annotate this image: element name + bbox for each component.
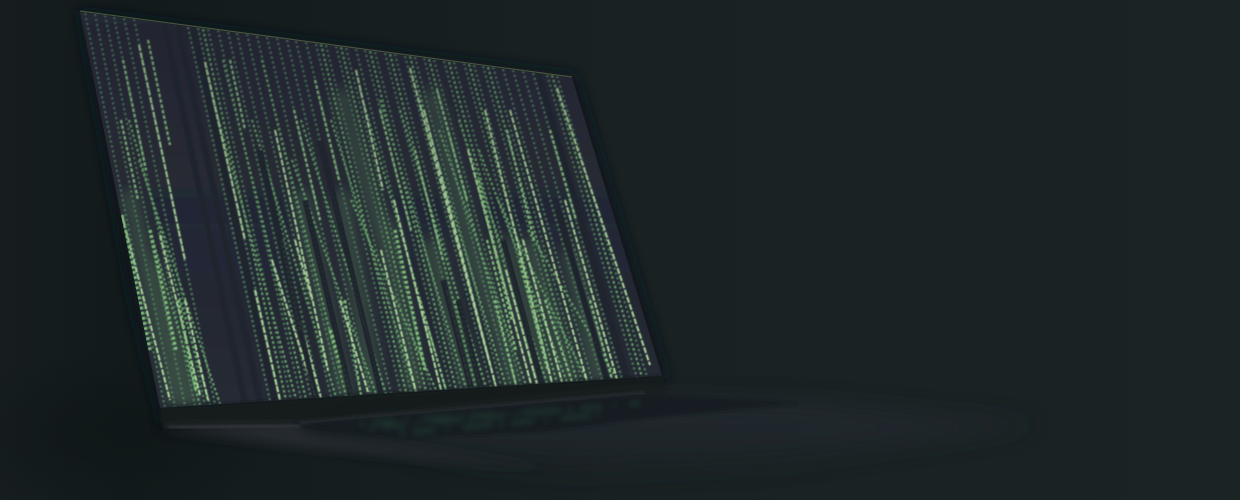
laptop hinge strip bbox=[160, 376, 664, 428]
bright blobs bbox=[122, 180, 548, 396]
dim dotted columns bbox=[85, 13, 647, 408]
photo scene: laptop in the dark bbox=[32, 1, 844, 500]
screen panel bbox=[80, 11, 662, 408]
deck rear edge bbox=[300, 393, 645, 423]
keyboard bbox=[298, 394, 800, 438]
deck back edge bbox=[168, 425, 300, 428]
laptop lid bezel bbox=[78, 10, 668, 424]
top edge highlight bbox=[80, 11, 572, 77]
laptop base deck bbox=[155, 393, 1040, 474]
mid green columns bbox=[129, 29, 642, 405]
dim top shading bbox=[84, 13, 636, 352]
soft green glow bands bbox=[128, 90, 600, 405]
base deck surface bbox=[330, 400, 1040, 474]
keyboard reflection of code bbox=[360, 403, 640, 433]
dark gaps bbox=[178, 74, 628, 400]
lower-left vignette bbox=[0, 350, 290, 500]
left deck wedge bbox=[155, 424, 560, 470]
bright streaks bbox=[122, 45, 650, 400]
code rain on the screen bbox=[80, 12, 662, 408]
secondary bright segments bbox=[121, 40, 612, 395]
